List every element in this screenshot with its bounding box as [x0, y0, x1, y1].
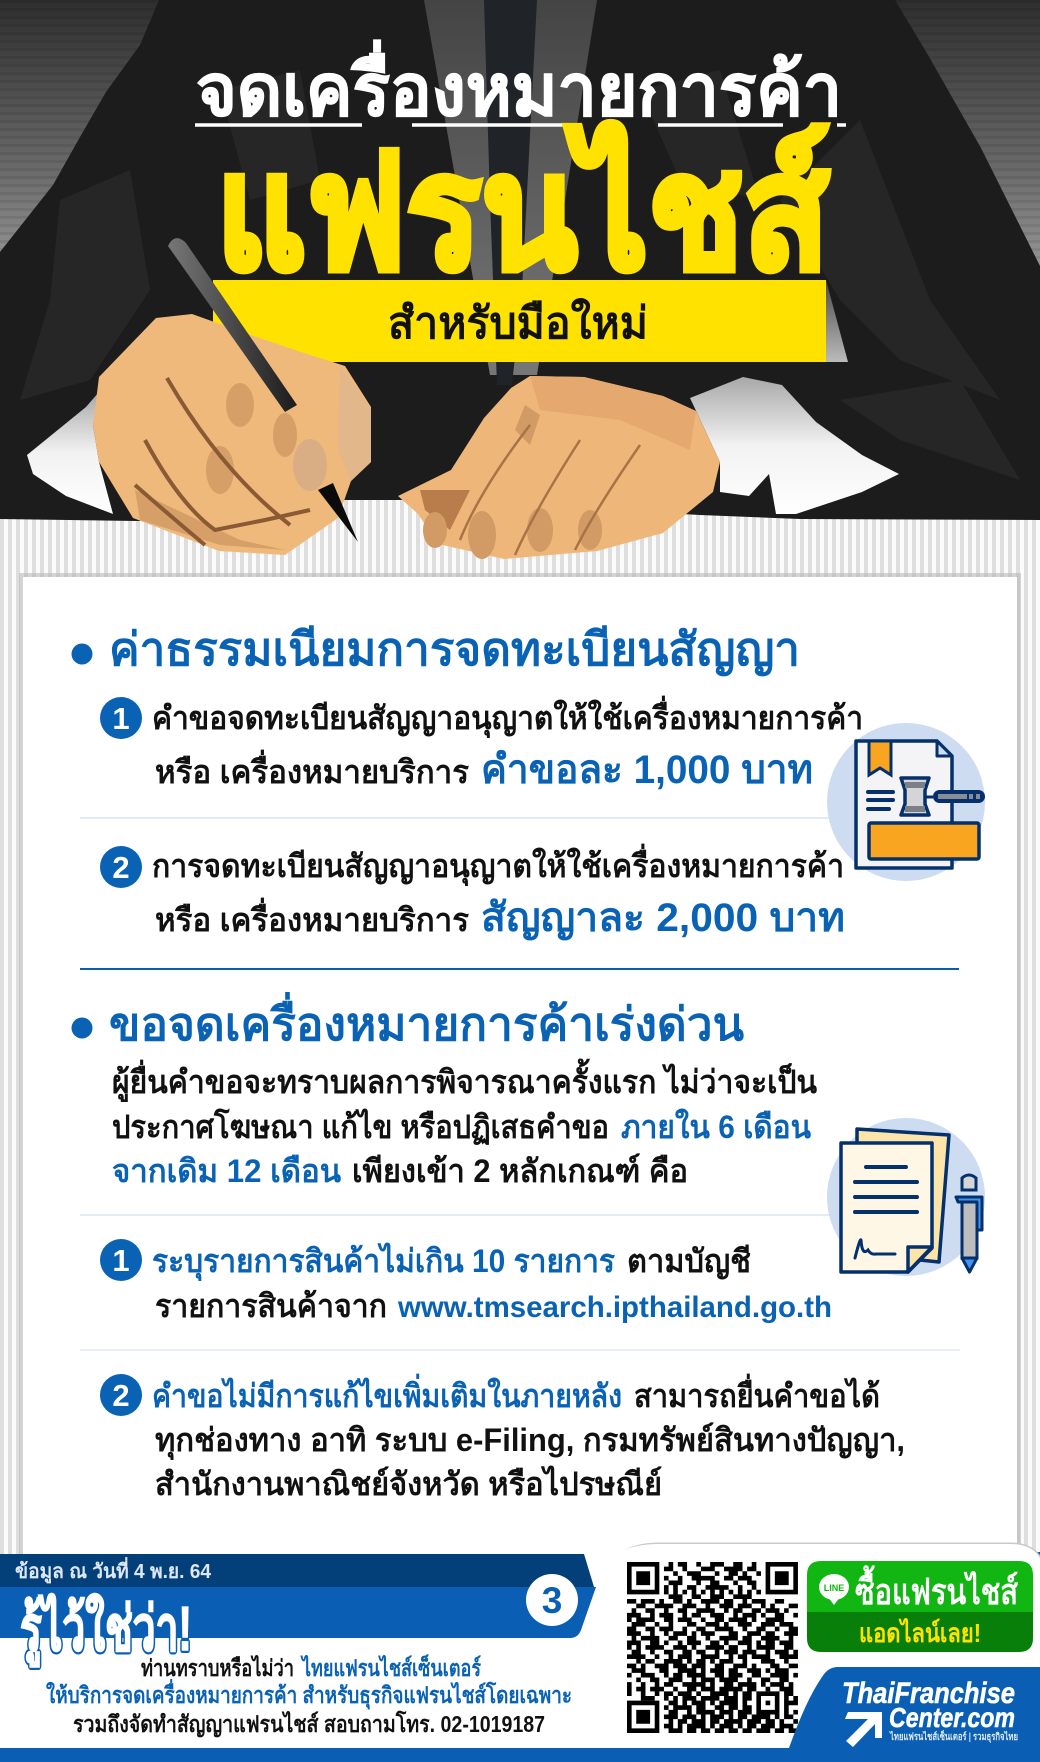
icon: hands with pen: [93, 238, 720, 559]
footer promo text: ไทยแฟรนไชส์เซ็นเตอร์: [300, 1653, 482, 1681]
yellow banner: สำหรับมือใหม่: [213, 280, 848, 362]
left hand: [93, 314, 371, 555]
icon: arrow: [845, 1712, 882, 1747]
criterion 1: ตามบัญชี: [627, 1243, 751, 1280]
icon: document with gavel: [827, 723, 985, 881]
criterion 1: รายการสินค้าจาก: [155, 1288, 387, 1324]
criterion 1: ระบุรายการสินค้าไม่เกิน 10 รายการ: [152, 1242, 615, 1282]
section 2 paragraph: ภายใน 6 เดือน: [621, 1108, 811, 1145]
LINE button: ซื้อแฟรนไชส์ แอดไลน์เลย!: [807, 1561, 1033, 1652]
pen nib: [318, 483, 358, 542]
fee item 1: คำขอจดทะเบียนสัญญาอนุญาตให้ใช้เครื่องหมายการค้า: [152, 695, 863, 739]
white panel: QR and buttons: [596, 1544, 1040, 1748]
divider: [80, 1349, 960, 1351]
right hand: [398, 376, 720, 559]
header illustration: businessman suit: [0, 0, 1040, 521]
section 1 heading: contract registration fee: ค่าธรรมเนียมการจดทะเบียนสัญญา: [109, 623, 800, 676]
footer promo text: [46, 1653, 572, 1738]
footer blue band with page number: 3: [542, 1580, 562, 1621]
footer blue band with page number: [0, 1574, 596, 1638]
fee item 2: [100, 843, 845, 941]
title: แฟรนไชส์: แฟรนไชส์: [216, 122, 829, 302]
heading: รู้ไว้ใช่ว่า!: รู้ไว้ใช่ว่า!: [20, 1593, 192, 1667]
icon: signed document and pen: [827, 1118, 985, 1276]
footer date band: [0, 1554, 594, 1587]
footer promo text: ให้บริการจดเครื่องหมายการค้า สำหรับธุรกิจแฟรนไชส์โดยเฉพาะ: [46, 1678, 572, 1710]
footer date band: ข้อมูล ณ วันที่ 4 พ.ย. 64: [15, 1556, 212, 1585]
fee item 2: 2: [112, 850, 130, 885]
LINE button: ซื้อแฟรนไชส์ แอดไลน์เลย!: แอดไลน์เลย!: [859, 1617, 981, 1648]
divider: [80, 817, 960, 819]
section 2 paragraph: ผู้ยื่นคำขอจะทราบผลการพิจารณาครั้งแรก ไม่ว่าจะเป็น: [112, 1058, 817, 1103]
shirt and tie: [424, 0, 597, 375]
title: จดเครื่องหมายการค้า: จดเครื่องหมายการค้า: [196, 39, 842, 131]
fee item 2: หรือ เครื่องหมายบริการ: [155, 897, 469, 938]
criterion 2: [100, 1373, 905, 1502]
section divider: [80, 968, 959, 970]
criterion 2: 2: [112, 1378, 130, 1413]
suit jacket: [0, 0, 1040, 521]
fee item 1: หรือ เครื่องหมายบริการ: [155, 749, 469, 790]
QR code: [627, 1562, 798, 1733]
criterion 2: ทุกช่องทาง อาทิ ระบบ e-Filing, กรมทรัพย์สินทางปัญญา,: [155, 1422, 905, 1461]
criterion 2: สามารถยื่นคำขอได้: [634, 1373, 880, 1414]
shirt cuffs: [27, 392, 113, 514]
ThaiFranchise Center logo: Center.com: [889, 1702, 1015, 1733]
yellow banner: สำหรับมือใหม่: สำหรับมือใหม่: [388, 297, 648, 348]
icon: LINE bubble: [819, 1574, 849, 1605]
pen body: [168, 238, 297, 412]
fee item 2: สัญญาละ 2,000 บาท: [481, 896, 845, 941]
fee item 1: 1: [112, 701, 130, 736]
section 2 paragraph: จากเดิม 12 เดือน: [112, 1153, 341, 1189]
section 2 paragraph: เพียงเข้า 2 หลักเกณฑ์ คือ: [352, 1153, 688, 1189]
footer promo text: รวมถึงจัดทำสัญญาแฟรนไชส์ สอบถามโทร. 02-1019187: [73, 1710, 545, 1738]
heading: รู้ไว้ใช่ว่า!: [20, 1593, 192, 1667]
footer: [0, 1544, 1040, 1762]
footer promo text: ท่านทราบหรือไม่ว่า: [141, 1654, 294, 1681]
criterion 2: สำนักงานพาณิชย์จังหวัด หรือไปรษณีย์: [155, 1465, 662, 1502]
criterion 1: 1: [112, 1243, 130, 1278]
ThaiFranchise Center logo: [789, 1667, 1040, 1748]
section 2 paragraph: ประกาศโฆษณา แก้ไข หรือปฏิเสธคำขอ: [112, 1108, 609, 1145]
criterion 1: [100, 1239, 832, 1324]
divider: [80, 1214, 960, 1216]
fee item 1: [100, 695, 863, 792]
section 2 paragraph: [112, 1058, 817, 1189]
ThaiFranchise Center logo: ThaiFranchise: [842, 1677, 1015, 1710]
criterion 1: www.tmsearch.ipthailand.go.th: [397, 1291, 832, 1324]
main white card: [19, 573, 1021, 1567]
heading: รู้ไว้ใช่ว่า!: รู้ไว้ใช่ว่า!: [20, 1593, 192, 1667]
section 2 heading: expedited trademark: ขอจดเครื่องหมายการค้าเร่งด่วน: [109, 992, 745, 1050]
criterion 2: คำขอไม่มีการแก้ไขเพิ่มเติมในภายหลัง: [152, 1373, 622, 1414]
fee item 1: คำขอละ 1,000 บาท: [481, 748, 813, 792]
fee item 2: การจดทะเบียนสัญญาอนุญาตให้ใช้เครื่องหมายการค้า: [152, 843, 844, 887]
icon: LINE bubble: LINE: [824, 1583, 844, 1593]
